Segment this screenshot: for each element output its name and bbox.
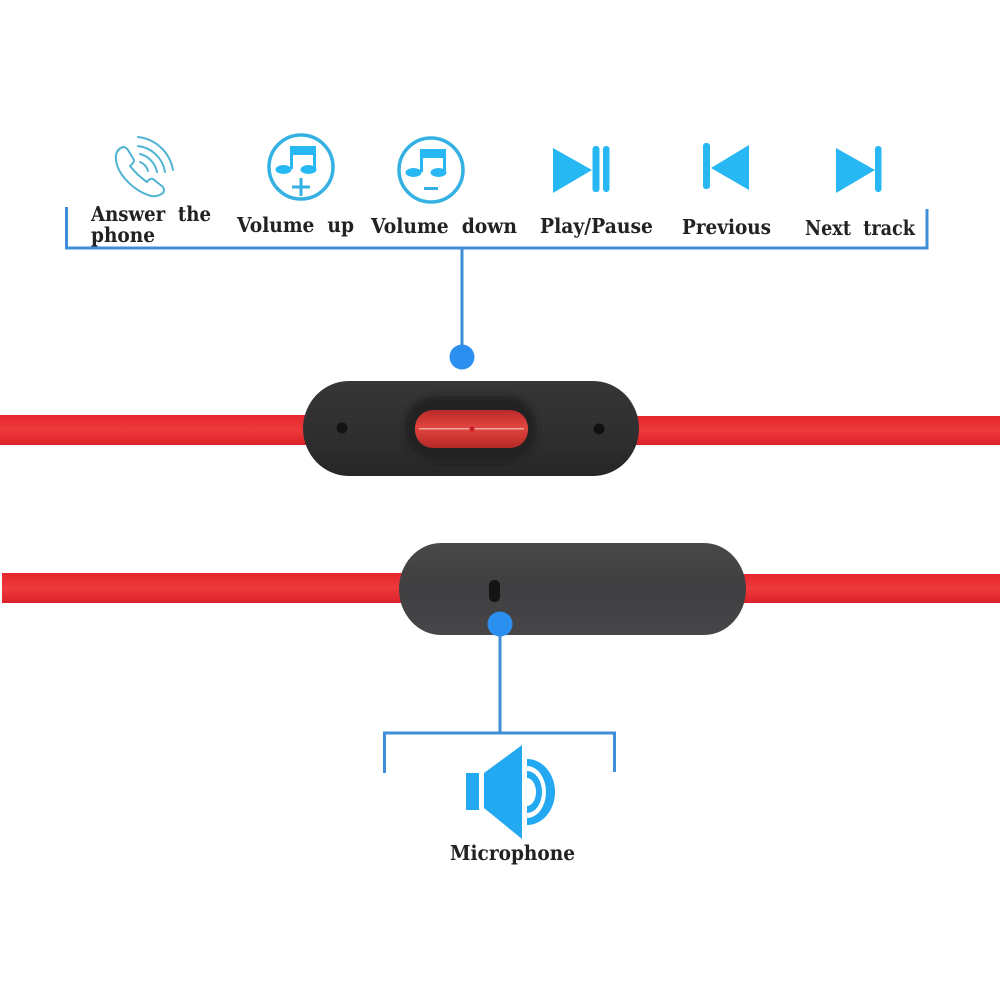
connector line: remote to bracket <box>460 248 464 350</box>
microphone bracket <box>384 733 614 773</box>
cable: upper right <box>632 416 1000 445</box>
cable: lower left <box>2 573 407 603</box>
cable: upper left <box>0 415 310 445</box>
label: volume up: Volume up <box>236 213 354 237</box>
red button <box>415 410 528 448</box>
icon: previous <box>703 143 749 190</box>
icon: microphone speaker <box>466 745 555 839</box>
marker dot: microphone <box>488 612 512 636</box>
icon: volume down <box>399 138 463 202</box>
label: volume down: Volume down <box>370 214 517 238</box>
label: next track: Next track <box>805 216 916 240</box>
left hole <box>336 422 348 434</box>
icon: answer the phone <box>116 137 173 196</box>
button recess <box>404 396 537 461</box>
icon: next track <box>836 146 882 193</box>
label: answer the phone: Answer the <box>90 202 211 226</box>
cable: lower right <box>738 574 1000 603</box>
marker dot: remote <box>450 344 474 370</box>
label: play/pause: Play/Pause <box>540 214 653 238</box>
right hole <box>594 424 604 434</box>
icon: play/pause <box>553 146 610 193</box>
remote control body <box>303 381 639 476</box>
icon: volume up <box>269 135 333 199</box>
button centre dot <box>470 426 474 432</box>
microphone slot <box>489 580 500 602</box>
microphone pod body <box>399 543 746 635</box>
button centre line <box>419 428 524 430</box>
top bracket <box>66 207 927 248</box>
label: answer the phone: phone <box>91 223 155 247</box>
label: previous: Previous <box>682 215 771 239</box>
label: microphone: Microphone <box>450 841 575 865</box>
connector line: microphone <box>498 630 502 733</box>
label: answer the phone <box>90 202 211 247</box>
